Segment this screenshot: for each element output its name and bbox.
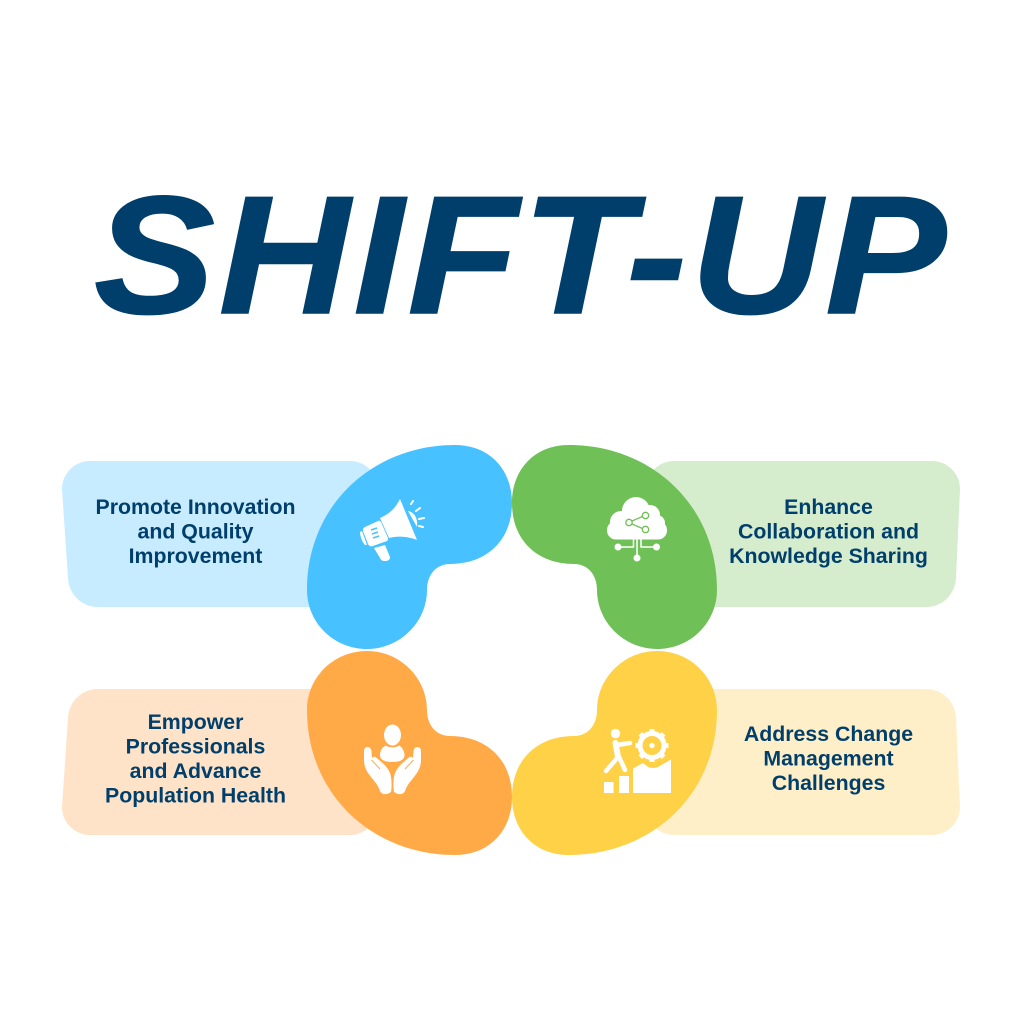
text: enhance collaboration: Knowledge Sharing (729, 544, 928, 568)
text: promote innovation: and Quality (138, 520, 254, 544)
text: enhance collaboration: Collaboration and (738, 520, 919, 544)
text: enhance collaboration: Enhance (784, 495, 873, 519)
panel: promote innovation (62, 461, 378, 607)
text: promote innovation: Promote Innovation (96, 495, 295, 519)
blob: green (512, 445, 717, 649)
text: empower professionals: and Advance (130, 759, 262, 783)
text: empower professionals: Professionals (126, 734, 265, 758)
panel: enhance collaboration (646, 461, 960, 607)
text: empower professionals: Empower (148, 710, 243, 734)
text: address change: Management (763, 746, 894, 770)
panel: address change (646, 689, 960, 835)
icon: megaphone (360, 499, 424, 561)
text: address change: Challenges (772, 771, 885, 795)
blob: orange (307, 651, 512, 855)
blob: yellow (512, 651, 717, 855)
icon: caring hands (364, 724, 421, 794)
icon: climbing steps and gear (604, 729, 671, 793)
blob: blue (307, 445, 512, 649)
icon: cloud network (607, 497, 667, 562)
title: SHIFT-UP (94, 162, 950, 350)
text: empower professionals: Population Health (105, 784, 286, 808)
text: address change: Address Change (744, 722, 913, 746)
panel: empower professionals (62, 689, 378, 835)
text: promote innovation: Improvement (129, 544, 262, 568)
